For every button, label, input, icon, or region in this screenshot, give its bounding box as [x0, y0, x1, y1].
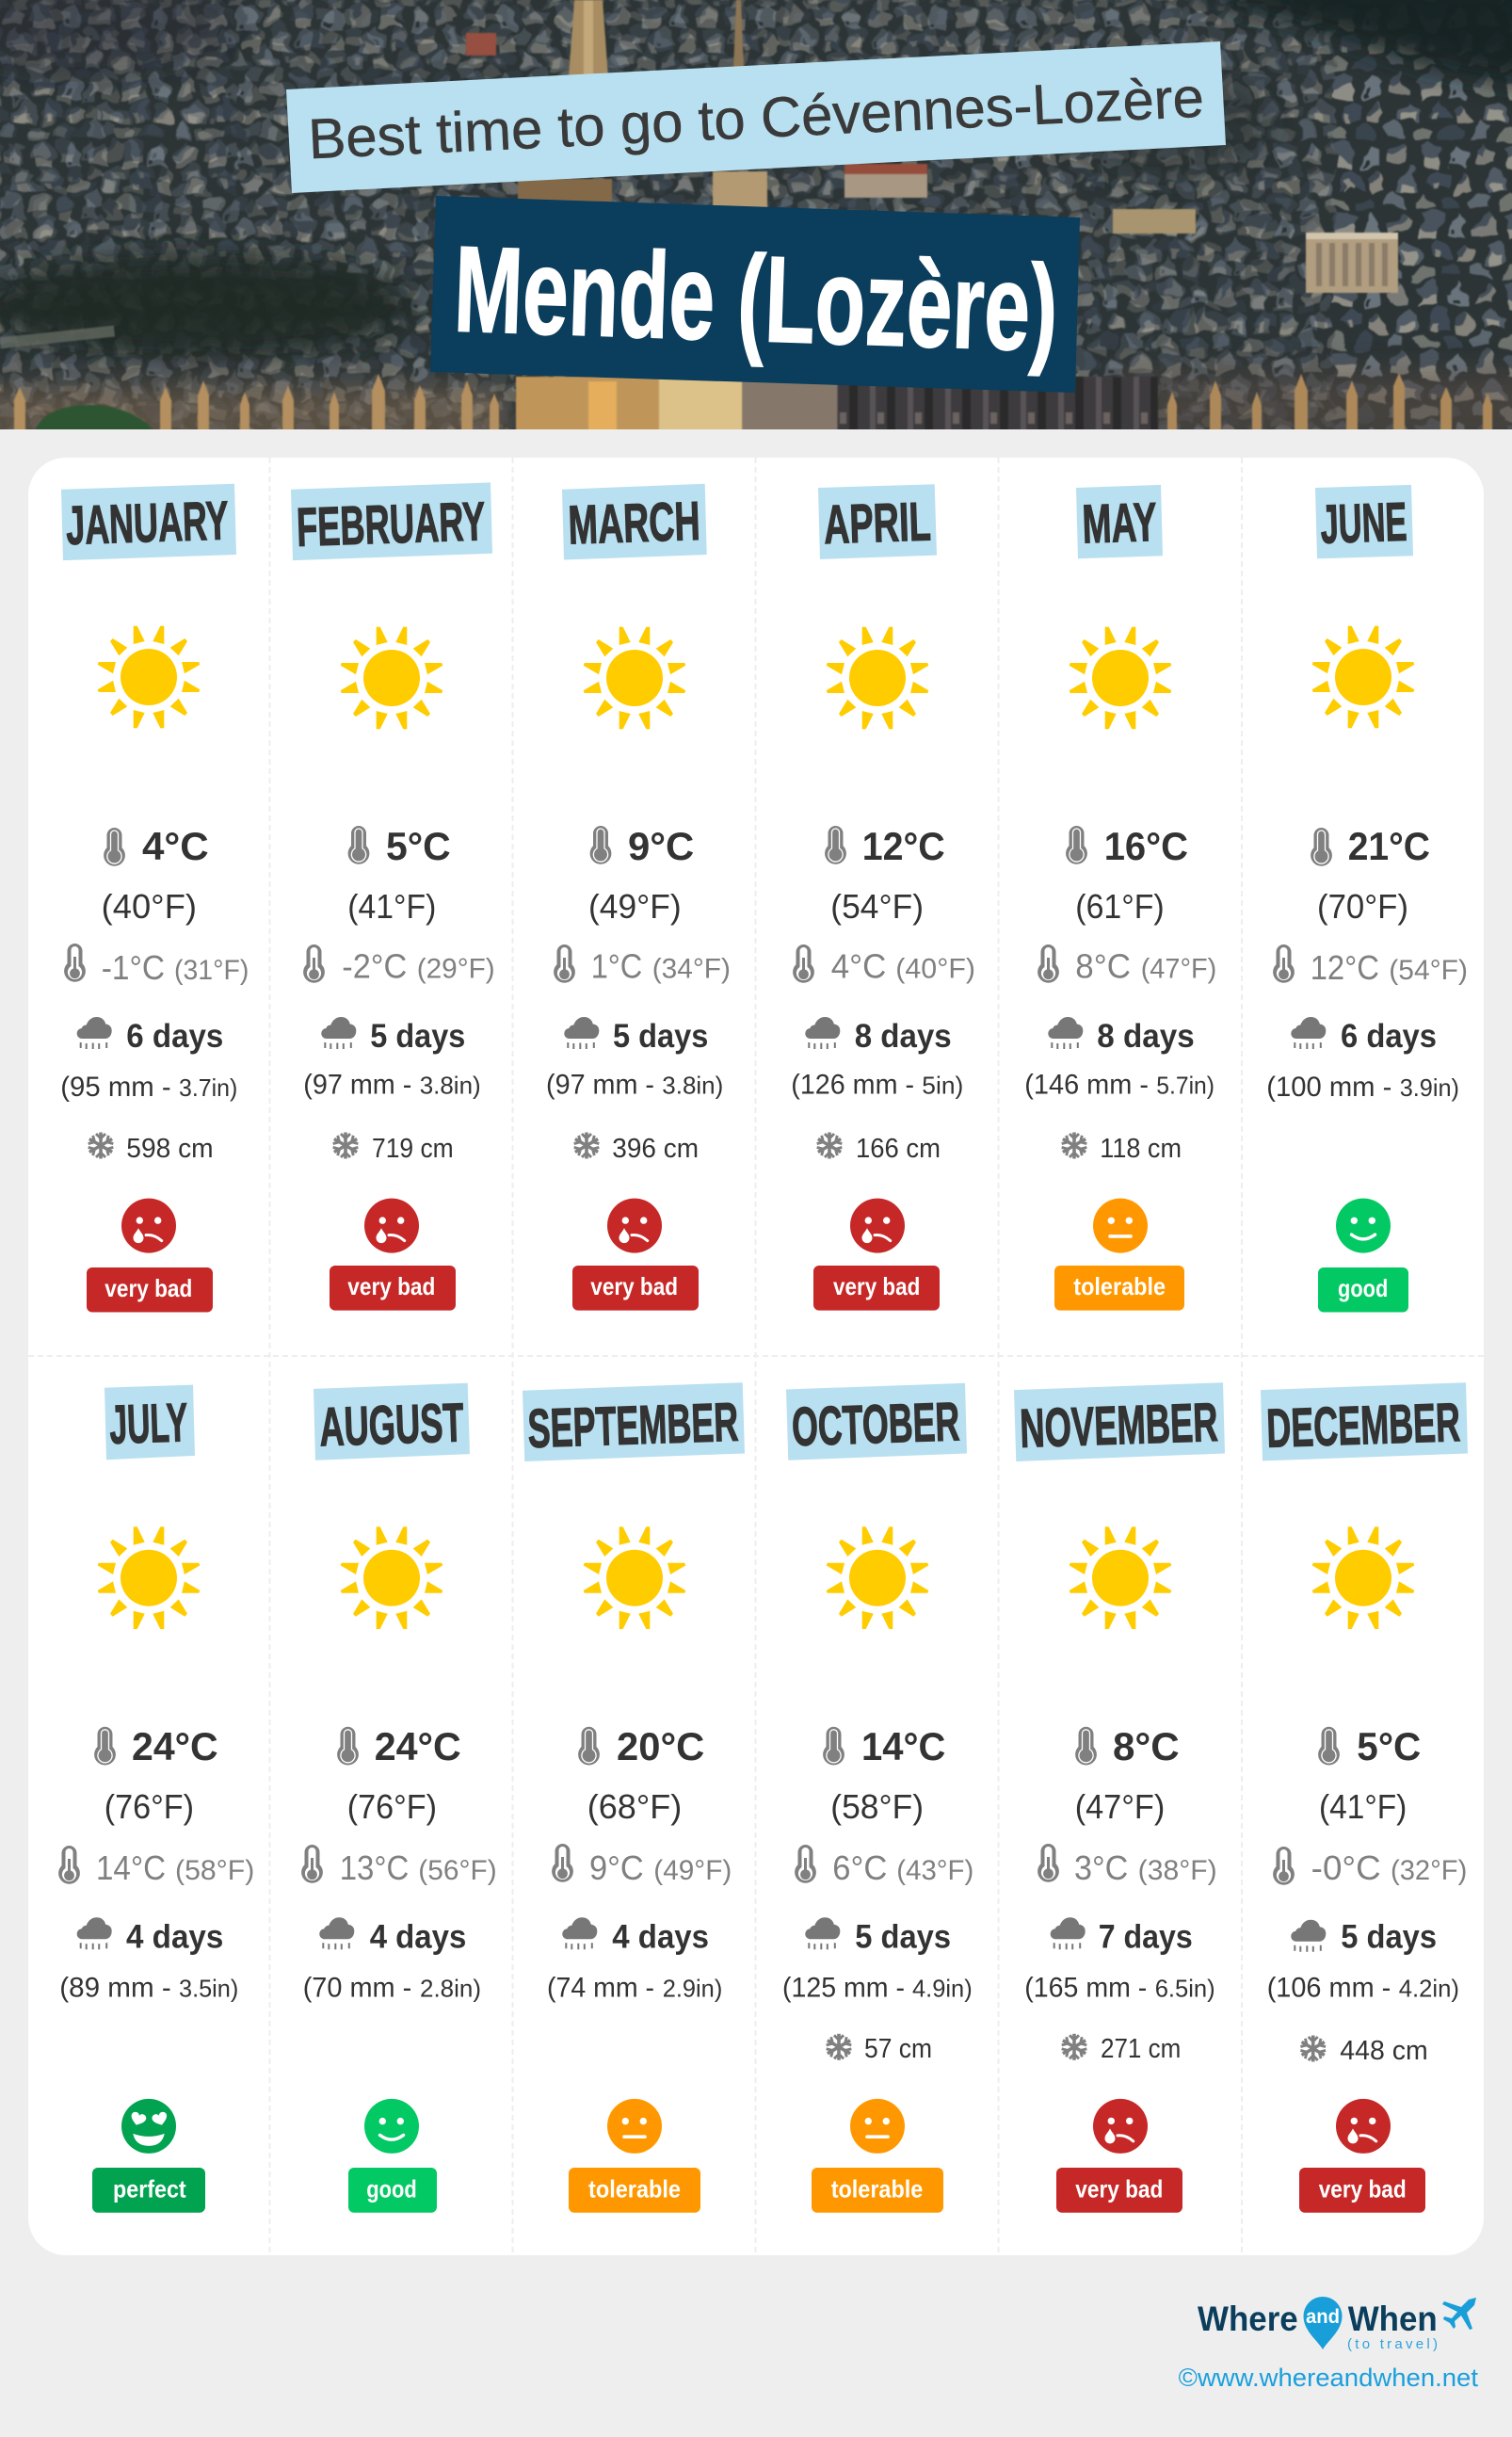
rain days — [564, 1017, 708, 1055]
low temperature — [1273, 1847, 1467, 1887]
rating badge — [812, 2168, 943, 2213]
icon: tolerable face — [850, 2099, 905, 2154]
rainfall: 3.8in) — [420, 1072, 481, 1100]
rain days — [77, 1917, 223, 1956]
icon: sun — [584, 1526, 685, 1629]
rainfall — [547, 1972, 722, 2003]
rainfall: (165 mm - — [1024, 1972, 1147, 2003]
rainfall — [303, 1972, 481, 2003]
low temperature — [1037, 1844, 1217, 1887]
rating badge — [1318, 1267, 1408, 1313]
icon: sun — [98, 1526, 200, 1629]
month heading: May — [1076, 485, 1163, 558]
high temperature — [590, 824, 694, 868]
rain days: 4 days — [612, 1919, 709, 1956]
rain days: 5 days — [613, 1018, 708, 1055]
high temperature: 24°C — [375, 1724, 461, 1768]
snowfall: 598 cm — [126, 1134, 214, 1164]
rainfall: (95 mm - — [60, 1072, 171, 1103]
rainfall: (74 mm - — [547, 1972, 654, 2003]
month heading: July: JULY — [108, 1392, 188, 1456]
snowfall — [1299, 2036, 1428, 2066]
month heading: May: MAY — [1082, 492, 1158, 556]
rainfall: (89 mm - — [59, 1972, 171, 2003]
snowfall — [1060, 2034, 1181, 2064]
rain days: 6 days — [1341, 1018, 1437, 1055]
icon: map pin with and: and — [1306, 2306, 1340, 2328]
rainfall — [303, 1070, 481, 1100]
panel: October — [782, 1383, 973, 2213]
month heading: January — [61, 484, 236, 560]
low temperature: (47°F) — [1141, 953, 1216, 984]
high temperature: 20°C — [617, 1724, 704, 1768]
icon: sun — [341, 1526, 442, 1629]
month heading: July — [105, 1385, 195, 1460]
rainfall: 5in) — [922, 1072, 963, 1100]
high temperature fahrenheit: (61°F) — [1075, 887, 1165, 926]
high temperature fahrenheit: (47°F) — [1075, 1787, 1165, 1826]
high temperature: 8°C — [1113, 1724, 1180, 1768]
high temperature — [1318, 1724, 1421, 1768]
rain days: 5 days — [1341, 1919, 1437, 1956]
rain days — [319, 1917, 466, 1956]
logo: Where and When: When — [1348, 2300, 1438, 2338]
panel: January — [60, 484, 249, 1313]
high temperature fahrenheit: (41°F) — [1319, 1787, 1407, 1826]
low temperature — [793, 944, 975, 985]
month heading: September: SEPTEMBER — [527, 1392, 739, 1460]
rating badge: tolerable — [588, 2174, 681, 2203]
low temperature: (54°F) — [1389, 955, 1468, 986]
low temperature: (58°F) — [175, 1855, 254, 1886]
rainfall: 6.5in) — [1155, 1974, 1215, 2002]
rain days — [77, 1017, 223, 1055]
low temperature: -2°C — [342, 946, 407, 985]
icon: sun — [1312, 1526, 1414, 1629]
rating badge: very bad — [347, 1272, 435, 1300]
rating badge: very bad — [105, 1274, 192, 1302]
month heading: November — [1014, 1382, 1225, 1461]
rating badge: good — [1338, 1274, 1388, 1302]
snowfall: 448 cm — [1340, 2036, 1428, 2066]
rainfall — [59, 1972, 238, 2003]
low temperature — [301, 1845, 497, 1887]
low temperature — [554, 944, 731, 985]
high temperature: 4°C — [142, 824, 209, 868]
low temperature: (32°F) — [1391, 1855, 1467, 1886]
rainfall — [60, 1072, 237, 1103]
snowfall — [331, 1132, 454, 1164]
rating badge — [569, 2168, 700, 2213]
rain days: 5 days — [855, 1919, 951, 1956]
snowfall: 396 cm — [612, 1134, 699, 1164]
rainfall: 2.9in) — [663, 1974, 722, 2002]
title banner: Mende (Lozère) — [452, 219, 1060, 378]
icon: tolerable face — [1093, 1199, 1148, 1253]
panel: March — [546, 484, 731, 1311]
high temperature: 14°C — [861, 1724, 945, 1768]
icon: very bad face — [850, 1199, 905, 1253]
icon: good face — [1336, 1199, 1391, 1253]
low temperature — [58, 1846, 254, 1887]
rating badge: very bad — [833, 1272, 920, 1300]
month heading: March — [562, 484, 707, 559]
month heading: June: JUNE — [1320, 492, 1407, 556]
low temperature: (31°F) — [174, 955, 249, 986]
low temperature: 9°C — [589, 1848, 644, 1887]
icon: sun — [98, 626, 200, 728]
low temperature: (34°F) — [652, 953, 731, 984]
low temperature: 13°C — [340, 1848, 409, 1887]
icon: good face — [364, 2099, 419, 2154]
snowfall — [815, 1132, 941, 1164]
rainfall: 3.8in) — [662, 1072, 723, 1100]
low temperature: (43°F) — [896, 1855, 973, 1886]
rainfall: (125 mm - — [782, 1972, 905, 2003]
rainfall: 5.7in) — [1156, 1072, 1214, 1100]
high temperature fahrenheit: (54°F) — [830, 887, 924, 926]
snowfall: 166 cm — [856, 1134, 941, 1164]
low temperature: (40°F) — [895, 953, 975, 984]
rating badge: perfect — [113, 2174, 186, 2203]
rainfall — [782, 1972, 973, 2003]
rainfall — [546, 1070, 723, 1100]
high temperature fahrenheit: (41°F) — [347, 887, 436, 926]
rating badge: very bad — [1075, 2174, 1163, 2203]
month heading: April: APRIL — [823, 491, 932, 556]
month heading: November: NOVEMBER — [1019, 1392, 1219, 1460]
hero photo of Mende — [0, 0, 1512, 429]
high temperature: 21°C — [1348, 824, 1430, 868]
month heading: September — [523, 1382, 745, 1461]
rainfall: (97 mm - — [303, 1070, 411, 1100]
high temperature: 12°C — [862, 824, 945, 868]
rating badge: very bad — [590, 1272, 678, 1300]
high temperature — [348, 824, 451, 868]
high temperature fahrenheit: (58°F) — [830, 1787, 924, 1826]
rainfall — [1024, 1070, 1214, 1100]
month heading: June — [1315, 485, 1413, 558]
high temperature — [823, 1724, 945, 1768]
rain days — [321, 1017, 465, 1055]
copyright url: ©www.whereandwhen.net — [1179, 2364, 1478, 2392]
month heading: January: JANUARY — [65, 490, 230, 557]
rainfall: 2.8in) — [420, 1974, 481, 2002]
low temperature: 6°C — [832, 1848, 887, 1887]
icon: sun — [827, 1526, 928, 1629]
rating badge — [1299, 2168, 1425, 2213]
high temperature — [337, 1724, 461, 1768]
month heading: August: AUGUST — [318, 1392, 465, 1458]
icon: very bad face — [1093, 2099, 1148, 2154]
rain days — [1291, 1919, 1437, 1956]
rainfall: 3.7in) — [179, 1073, 237, 1102]
panel: May — [1024, 485, 1216, 1311]
logo: Where and When: Where — [1198, 2300, 1298, 2338]
title banner — [430, 196, 1080, 393]
panel: June — [1266, 485, 1468, 1313]
month heading: April — [818, 484, 937, 559]
month heading: October: OCTOBER — [791, 1391, 960, 1458]
rating badge: tolerable — [831, 2174, 923, 2203]
month heading: August — [314, 1383, 470, 1461]
icon: perfect face — [121, 2099, 176, 2154]
panel: February — [291, 482, 495, 1311]
low temperature: 14°C — [96, 1848, 166, 1887]
rainfall: 4.9in) — [912, 1974, 973, 2002]
low temperature — [303, 944, 495, 985]
low temperature: 8°C — [1075, 946, 1131, 985]
rating badge: good — [366, 2174, 417, 2203]
rainfall — [1266, 1072, 1459, 1103]
high temperature: 9°C — [628, 824, 694, 868]
rainfall: (106 mm - — [1267, 1972, 1391, 2003]
month heading: October — [786, 1383, 967, 1461]
icon: sun — [827, 627, 928, 729]
icon: tolerable face — [607, 2099, 662, 2154]
rainfall — [1267, 1972, 1459, 2003]
icon: sun — [341, 627, 442, 729]
low temperature — [1273, 944, 1468, 987]
snowfall: 719 cm — [372, 1134, 454, 1164]
low temperature: -0°C — [1311, 1848, 1381, 1887]
high temperature: 16°C — [1104, 824, 1188, 868]
high temperature — [104, 824, 209, 868]
icon: airplane — [1442, 2298, 1476, 2330]
rating badge: tolerable — [1073, 1272, 1166, 1300]
rainfall — [1024, 1972, 1215, 2003]
high temperature fahrenheit: (68°F) — [587, 1787, 682, 1826]
subtitle banner: Best time to go to Cévennes-Lozère — [307, 66, 1205, 170]
low temperature: -1°C — [102, 948, 165, 987]
high temperature — [578, 1724, 704, 1768]
icon: sun — [1312, 626, 1414, 728]
high temperature fahrenheit: (76°F) — [105, 1787, 194, 1826]
rain days: 6 days — [126, 1018, 223, 1055]
icon: very bad face — [607, 1199, 662, 1253]
low temperature — [1037, 944, 1216, 985]
month heading: February: FEBRUARY — [296, 491, 486, 558]
rainfall: 4.2in) — [1399, 1974, 1459, 2002]
rainfall: 3.5in) — [179, 1974, 238, 2002]
subtitle banner — [286, 41, 1226, 193]
high temperature — [1075, 1724, 1180, 1768]
high temperature — [1311, 824, 1430, 868]
high temperature fahrenheit: (70°F) — [1317, 887, 1408, 926]
rain days — [1291, 1017, 1437, 1055]
low temperature — [552, 1844, 732, 1887]
low temperature — [795, 1845, 973, 1887]
low temperature: (29°F) — [417, 953, 495, 984]
high temperature fahrenheit: (40°F) — [102, 887, 197, 926]
low temperature: 1°C — [591, 946, 642, 985]
high temperature — [94, 1724, 218, 1768]
low temperature: 3°C — [1074, 1848, 1128, 1887]
snowfall — [825, 2034, 932, 2064]
rainfall: (70 mm - — [303, 1972, 411, 2003]
rain days: 8 days — [1097, 1018, 1195, 1055]
low temperature: (49°F) — [653, 1855, 732, 1886]
high temperature: 5°C — [1357, 1724, 1421, 1768]
icon: sun — [1070, 1526, 1171, 1629]
icon: very bad face — [364, 1199, 419, 1253]
rain days: 8 days — [855, 1018, 952, 1055]
low temperature: 4°C — [831, 946, 886, 985]
high temperature: 24°C — [132, 1724, 218, 1768]
high temperature — [825, 824, 945, 868]
icon: sun — [1070, 627, 1171, 729]
rain days — [1048, 1017, 1195, 1055]
rating badge — [348, 2168, 437, 2213]
snowfall — [87, 1132, 214, 1164]
rainfall: (126 mm - — [791, 1070, 914, 1100]
panel: December — [1261, 1382, 1468, 2213]
rating badge — [572, 1266, 699, 1311]
high temperature fahrenheit: (76°F) — [347, 1787, 437, 1826]
rain days — [805, 1917, 951, 1956]
rating badge: very bad — [1319, 2174, 1407, 2203]
icon: very bad face — [121, 1199, 176, 1253]
rating badge — [1056, 2168, 1182, 2213]
rain days — [805, 1017, 952, 1055]
high temperature: 5°C — [386, 824, 451, 868]
panel: April — [791, 484, 975, 1311]
rain days: 4 days — [126, 1919, 223, 1956]
panel: November — [1014, 1382, 1225, 2213]
rating badge — [813, 1266, 940, 1311]
rain days — [562, 1917, 709, 1956]
panel: August — [301, 1383, 497, 2213]
rating badge — [87, 1267, 213, 1313]
low temperature — [64, 944, 249, 987]
snowfall: 118 cm — [1100, 1134, 1182, 1164]
logo: Where and When — [1198, 2297, 1476, 2352]
rainfall: (146 mm - — [1024, 1070, 1149, 1100]
low temperature: 12°C — [1311, 948, 1379, 987]
rainfall: (97 mm - — [546, 1070, 654, 1100]
rain days — [1051, 1917, 1193, 1956]
low temperature: (56°F) — [418, 1855, 497, 1886]
low temperature: (38°F) — [1138, 1855, 1217, 1886]
icon: sun — [584, 627, 685, 729]
rating badge — [92, 2168, 205, 2213]
rating badge — [1054, 1266, 1184, 1311]
panel: July — [58, 1385, 254, 2213]
logo: Where and When: (to travel) — [1347, 2336, 1438, 2352]
rating badge — [330, 1266, 456, 1311]
panel: September — [523, 1382, 745, 2213]
rainfall: (100 mm - — [1266, 1072, 1391, 1103]
snowfall: 271 cm — [1101, 2034, 1181, 2064]
month heading: February — [291, 482, 492, 560]
snowfall — [1060, 1132, 1182, 1164]
icon: very bad face — [1336, 2099, 1391, 2154]
white card panel — [28, 458, 1484, 2255]
high temperature — [1066, 824, 1188, 868]
snowfall — [572, 1132, 699, 1164]
rain days: 5 days — [370, 1018, 465, 1055]
rain days: 7 days — [1099, 1919, 1193, 1956]
rain days: 4 days — [370, 1919, 466, 1956]
rainfall: 3.9in) — [1400, 1073, 1459, 1102]
month heading: March: MARCH — [568, 491, 701, 557]
snowfall: 57 cm — [864, 2034, 932, 2064]
high temperature fahrenheit: (49°F) — [588, 887, 682, 926]
icon: map pin with and — [1303, 2297, 1343, 2349]
